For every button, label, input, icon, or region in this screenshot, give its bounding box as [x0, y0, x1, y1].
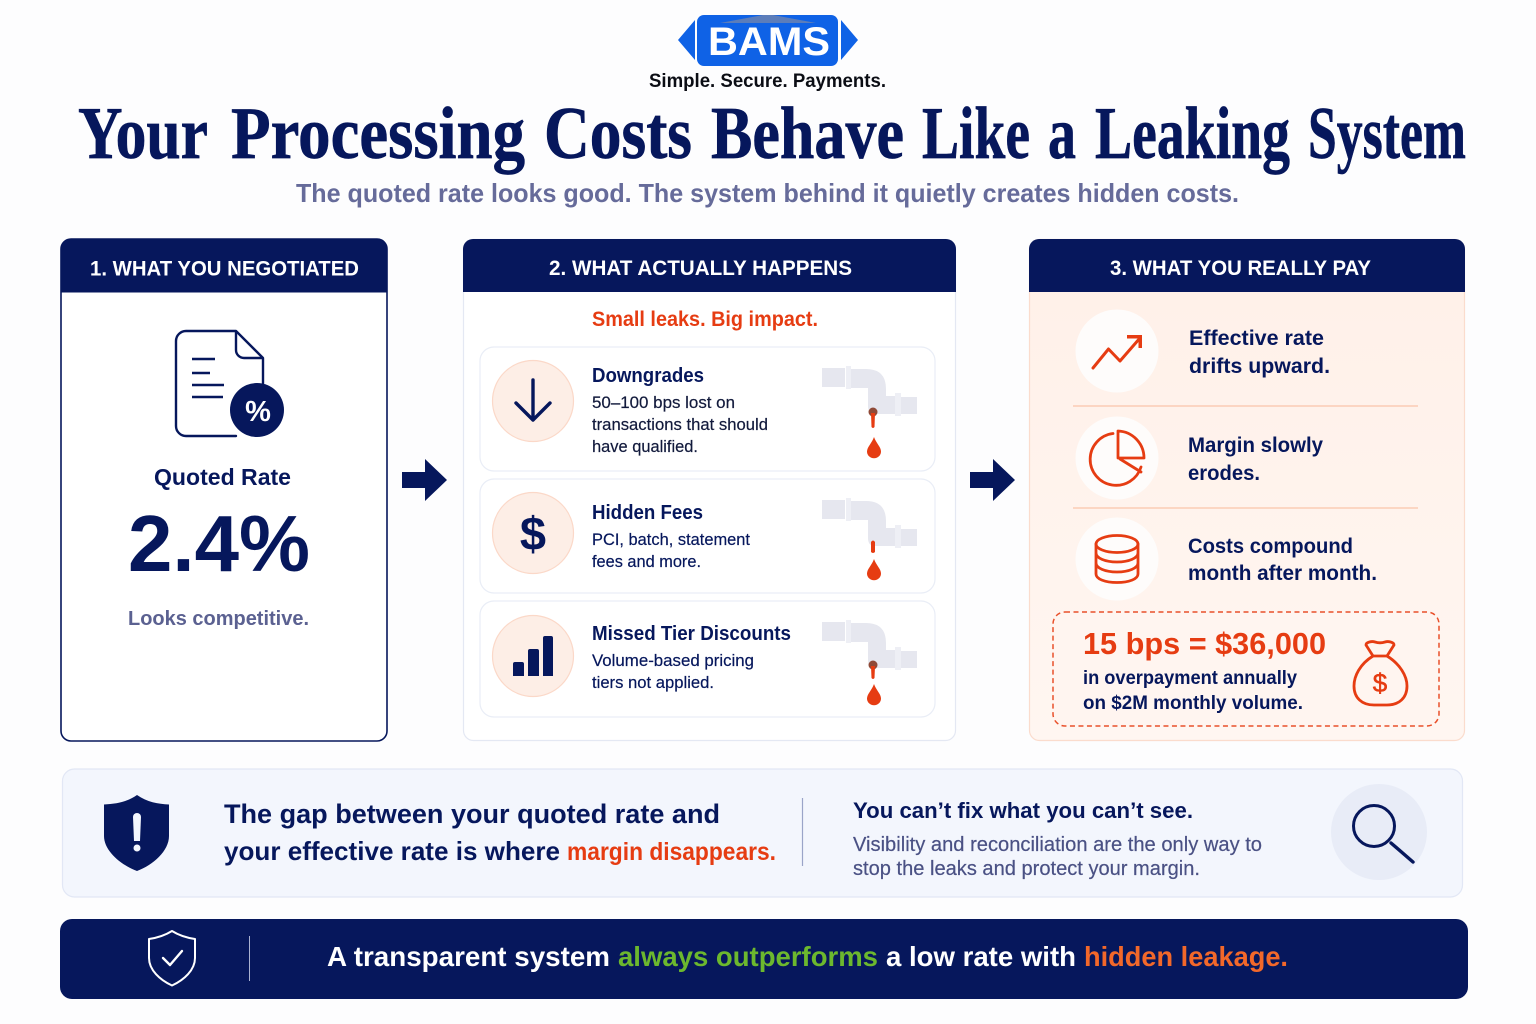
card: downgrades: [480, 347, 935, 471]
icon: dollar: $: [520, 507, 546, 560]
insight statement: The gap between your quoted rate and: [224, 799, 720, 829]
icon: down arrow: [492, 360, 574, 442]
footer message: always outperforms: [618, 941, 878, 972]
card text: [592, 651, 754, 692]
icon: money bag: $: [1373, 668, 1388, 698]
title: a: [1048, 93, 1076, 175]
title: Processing: [231, 93, 525, 175]
footer message: A transparent system: [327, 941, 610, 972]
callout text: on $2M monthly volume.: [1083, 693, 1303, 714]
item text: [1189, 327, 1330, 378]
icon: leaking pipe: [822, 366, 917, 458]
card text: PCI, batch, statement: [592, 530, 750, 549]
tagline: Simple. Secure. Payments.: [649, 71, 886, 92]
icon: pie chart: [1076, 416, 1158, 500]
arrow: panel 1 to 2: [402, 459, 447, 501]
card text: have qualified.: [592, 437, 698, 456]
insight statement: your effective rate is where: [224, 836, 560, 866]
card: missed tier discounts: [480, 601, 935, 717]
item text: [1188, 434, 1323, 485]
insight text: [853, 834, 1262, 880]
card text: tiers not applied.: [592, 673, 714, 692]
logo: BAMS: BAMS: [708, 20, 830, 64]
callout: overpayment: [1053, 612, 1439, 726]
footer message: a low rate with: [886, 941, 1076, 972]
panel heading 2: 2. WHAT ACTUALLY HAPPENS: [549, 257, 852, 280]
footer banner: [60, 919, 1468, 999]
icon: magnifier: [1331, 784, 1427, 880]
icon: shield check: [149, 931, 195, 986]
quoted rate note: Looks competitive.: [128, 608, 309, 630]
panel: what actually happens: [463, 239, 956, 740]
footer message: hidden leakage.: [1084, 941, 1288, 972]
panel: what you really pay: [1029, 239, 1465, 740]
icon: trend up: [1076, 310, 1158, 392]
title: [78, 93, 1466, 175]
card text: Volume-based pricing: [592, 651, 754, 670]
callout text: in overpayment annually: [1083, 668, 1297, 689]
logo: BAMS: [678, 15, 858, 66]
insight statement: [224, 799, 776, 866]
insight text: stop the leaks and protect your margin.: [853, 858, 1200, 880]
icon: leaking pipe: [822, 498, 917, 580]
item text: erodes.: [1188, 462, 1260, 485]
icon: bar chart: [492, 616, 574, 696]
icon: coin stack: [1076, 518, 1158, 600]
card: hidden fees: [480, 479, 935, 593]
item text: Effective rate: [1189, 327, 1324, 350]
icon: money bag: [1354, 642, 1407, 705]
callout figure: 15 bps = $36,000: [1083, 626, 1326, 661]
item text: Costs compound: [1188, 535, 1353, 558]
item text: month after month.: [1188, 562, 1377, 585]
insight statement: margin disappears.: [567, 838, 776, 866]
insight text: Visibility and reconciliation are the only way to: [853, 834, 1262, 856]
title: Your: [78, 93, 208, 175]
icon: document with percent: %: [245, 396, 271, 428]
card heading: Downgrades: [592, 365, 704, 387]
item text: drifts upward.: [1189, 355, 1330, 378]
quoted rate value: 2.4%: [128, 499, 310, 588]
card text: [592, 393, 768, 456]
callout text: [1083, 668, 1303, 714]
icon: shield alert: [104, 795, 169, 871]
arrow: panel 2 to 3: [970, 459, 1015, 501]
panel: what you negotiated: [61, 239, 387, 741]
card text: fees and more.: [592, 552, 701, 571]
title: Like: [922, 93, 1030, 175]
title: Leaking: [1095, 93, 1290, 175]
item: effective rate: [1076, 310, 1330, 392]
card heading: Hidden Fees: [592, 502, 703, 524]
title: Behave: [711, 93, 904, 175]
icon: document with percent: [176, 331, 284, 437]
card text: 50–100 bps lost on: [592, 393, 735, 412]
title: System: [1308, 93, 1466, 175]
icon: dollar: [492, 492, 574, 574]
panel: insight band: [62, 769, 1462, 897]
subtitle: The quoted rate looks good. The system behind it quietly creates hidden costs.: [296, 178, 1239, 208]
footer message: [327, 941, 1288, 972]
tagline: small leaks: Small leaks. Big impact.: [592, 308, 818, 331]
item: costs compound: [1076, 518, 1377, 600]
card heading: Missed Tier Discounts: [592, 623, 791, 645]
quoted rate label: Quoted Rate: [154, 464, 291, 490]
icon: leaking pipe: [822, 620, 917, 705]
panel heading 3: 3. WHAT YOU REALLY PAY: [1110, 257, 1371, 280]
insight heading: You can’t fix what you can’t see.: [853, 798, 1193, 823]
card text: transactions that should: [592, 415, 768, 434]
card text: [592, 530, 750, 571]
panel heading 1: 1. WHAT YOU NEGOTIATED: [90, 258, 359, 280]
title: Costs: [544, 93, 692, 175]
item: margin erodes: [1076, 416, 1323, 500]
item text: [1188, 535, 1377, 585]
item text: Margin slowly: [1188, 434, 1323, 457]
